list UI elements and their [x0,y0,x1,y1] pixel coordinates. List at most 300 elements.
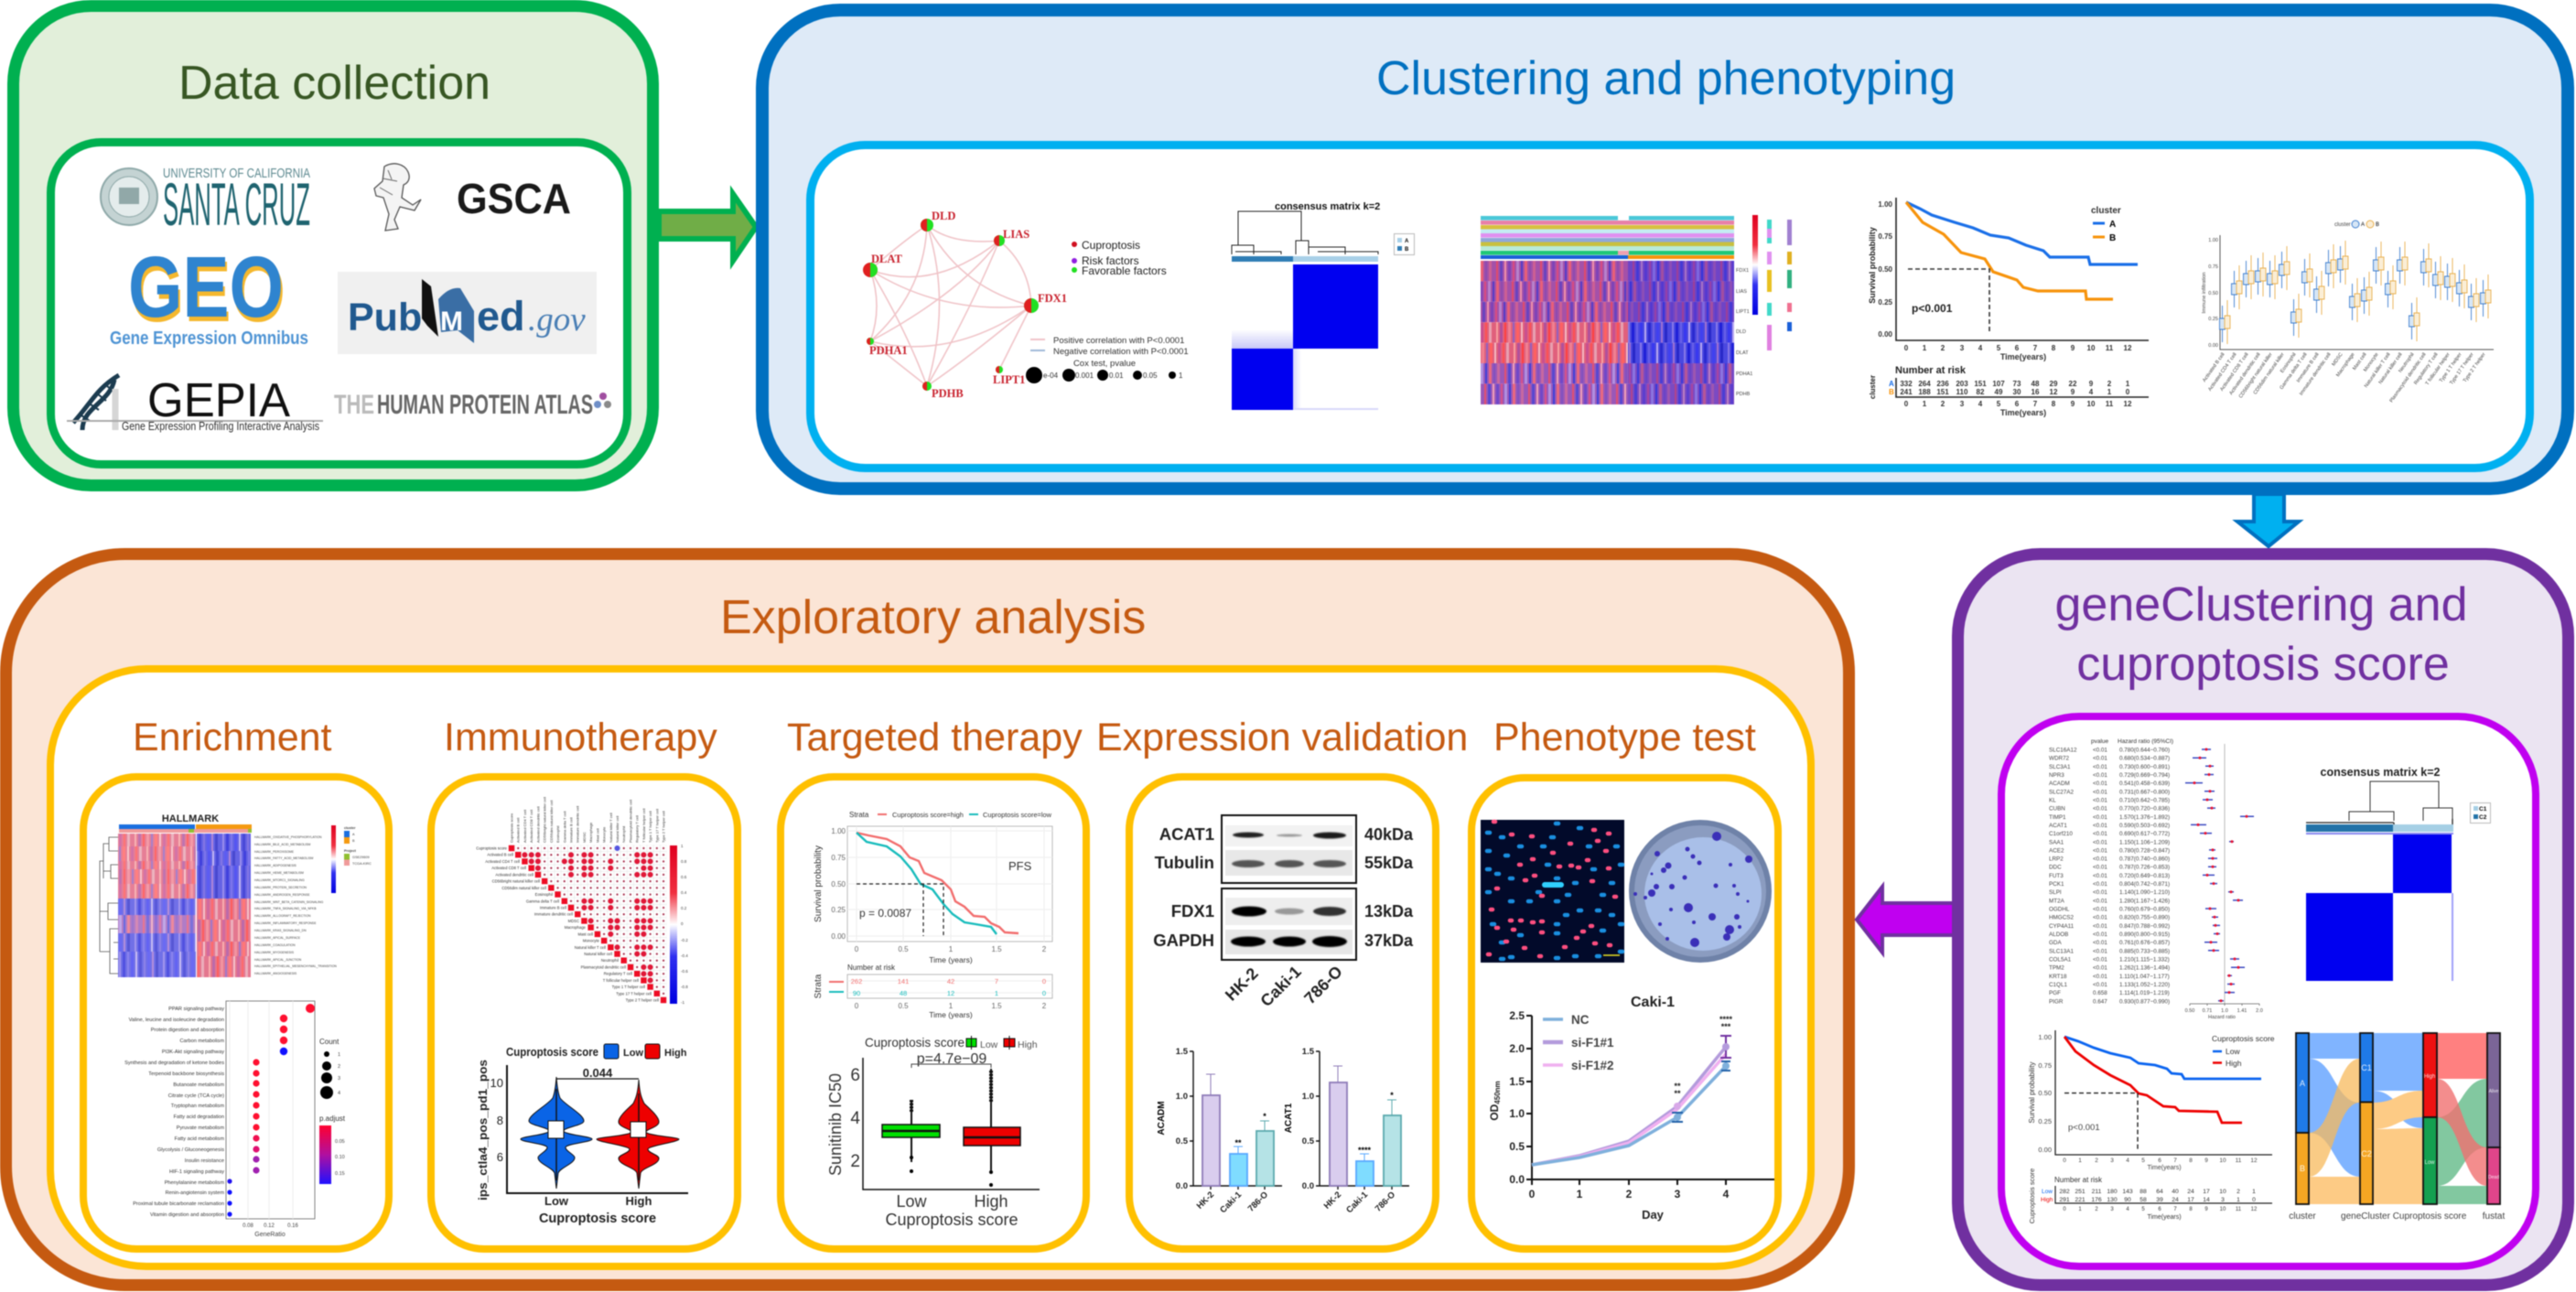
chart: sankey diagram: cluster [2289,1211,2316,1222]
chart: hallmark heatmap: HALLMARK_ALLOGRAFT_REJECTION [254,914,311,918]
chart: forest plot: 1.210(1.115−1.332) [2119,957,2170,963]
chart: forest plot: DDC [2049,865,2062,871]
chart: immune infiltration boxplot: Activated dendritic cell [2228,352,2262,396]
chart: gene correlation network: DLD [932,210,955,222]
chart: Caki-1 growth curve: 3 [1675,1188,1681,1200]
chart: survival curve by cuproptosis score: 5 [2141,1157,2145,1164]
chart: KEGG dot plot: Renin-angiotensin system [166,1190,224,1196]
figure: western blots: 40kDa [1364,825,1414,844]
heading: geneClustering and cuproptosis score: geneClustering and [2055,578,2467,631]
figure: western blots: Tubulin [1155,853,1214,872]
chart: immune infiltration boxplot: Plasmacytoid dendritic cell [2389,352,2428,404]
logo: GSCA: GSCA [457,175,571,222]
chart: survival curve by cluster: B [2109,233,2116,243]
chart: correlation matrix: Regulatory T cell [635,815,640,843]
chart: forest plot: GDA [2049,940,2062,946]
chart: forest plot: <0.01 [2093,856,2107,863]
chart: correlation matrix: Natural killer cell [615,816,620,843]
chart: forest plot: 0.770(0.720−0.836) [2119,806,2170,813]
chart: KEGG dot plot: Insulin resistance [185,1158,224,1164]
chart: hallmark heatmap: HALLMARK_BILE_ACID_METABOLISM [254,843,311,846]
chart: forest plot: <0.01 [2093,965,2107,972]
chart: PFS survival curve: 48 [900,989,907,997]
chart: sankey diagram [2289,1033,2505,1222]
chart: KEGG dot plot: 0.12 [264,1223,275,1229]
chart: correlation matrix [476,797,688,1005]
panel: phenotype test [1471,778,1778,1249]
chart: immune infiltration boxplot: Mast cell [2352,352,2368,371]
figure: fluorescence microscopy [1481,820,1624,963]
chart: PFS survival curve: 1 [949,945,954,953]
chart: survival curve by cuproptosis score: 2 [2236,1189,2240,1195]
chart: gene correlation network: e-04 [1043,371,1059,380]
chart: forest plot: 1.570(1.376−1.892) [2119,814,2170,821]
chart: survival curve by cuproptosis score: High [2041,1197,2053,1203]
chart: survival curve by cuproptosis score: 4 [2126,1207,2129,1212]
chart: PFS survival curve: Time (years) [929,1010,973,1019]
chart: forest plot: MT2A [2049,898,2065,904]
chart: hallmark heatmap: cluster [344,826,356,830]
chart: forest plot [2049,738,2263,1020]
chart: forest plot: <0.01 [2093,756,2107,762]
chart: forest plot: <0.01 [2093,865,2107,871]
chart: correlation matrix: T follicular helper cell [603,978,639,983]
chart: ACAT1 bars: 1.0 [1302,1092,1314,1102]
chart: forest plot: <0.01 [2093,889,2107,896]
chart: KEGG dot plot: 0.15 [335,1171,345,1177]
chart: KEGG dot plot: 0.08 [243,1223,253,1229]
chart: survival curve by cluster: 7 [2033,400,2038,408]
chart: KEGG dot plot [124,1001,346,1238]
chart: correlation matrix: Neutrophil [621,826,626,843]
chart: ACAT1 bars: ACAT1 [1284,1103,1294,1133]
chart: sunitinib boxplot: Low [896,1192,928,1211]
chart: forest plot: 0.590(0.503−0.692) [2119,823,2170,829]
chart: ACADM bars: ** [1234,1138,1242,1147]
panel: exploratory analysis [5,554,1848,1285]
chart: survival curve by cuproptosis score: 24 [2187,1189,2194,1195]
chart: correlation matrix: -1 [681,1000,684,1005]
logo: UC Santa Cruz [101,167,310,238]
chart: annotated heatmap: PDHA1 [1736,371,1752,377]
chart: ACAT1 bars: 0.0 [1302,1181,1314,1191]
chart: survival curve by cuproptosis score: 10 [2219,1157,2226,1164]
chart: KEGG dot plot: PI3K-Akt signaling pathway [162,1050,224,1055]
chart: correlation matrix: Gamma delta T cell [562,811,566,843]
chart: correlation matrix: CD56dim natural killer cell [501,886,546,890]
chart: forest plot: 0.647 [2093,998,2107,1005]
chart: violin plot: Low [544,1194,569,1208]
chart: survival curve by cuproptosis score: 8 [2189,1157,2193,1164]
chart: KEGG dot plot: Fatty acid degradation [174,1114,224,1120]
chart: ACAT1 bars: * [1390,1091,1394,1100]
chart: correlation matrix: Activated CD4 T cell [485,859,520,864]
chart: forest plot: ACE2 [2049,847,2064,854]
chart: hallmark heatmap: HALLMARK_WNT_BETA_CATENIN_SIGNALING [254,900,324,904]
chart: KEGG dot plot: Citrate cycle (TCA cycle) [168,1093,224,1099]
chart: immune infiltration boxplot: Immature dendritic cell [2299,352,2333,396]
chart: correlation matrix: Monocyte [583,939,600,943]
heading: immunotherapy: Immunotherapy [444,716,717,759]
chart: forest plot: PIGR [2049,998,2064,1005]
chart: survival curve by cuproptosis score: 24 [2172,1197,2179,1203]
chart: survival curve by cluster: 3 [1960,400,1965,408]
chart: correlation matrix: MDSC [582,832,587,843]
chart: hallmark heatmap: HALLMARK_ADIPOGENESIS [254,864,297,867]
logo: GEO: GEO [128,239,284,336]
chart: ACADM bars: 0.0 [1176,1181,1188,1191]
chart: violin plot: 8 [497,1114,503,1127]
chart: violin plot: Cuproptosis score [539,1211,656,1226]
chart: sankey diagram: Alive [2489,1089,2499,1094]
chart: forest plot: COL5A1 [2049,957,2072,963]
chart: hallmark heatmap: HALLMARK_INFLAMMATORY_RESPONSE [254,921,317,925]
chart: forest plot: SLC16A12 [2049,747,2077,754]
chart: forest plot: TPM2 [2049,965,2064,972]
chart: survival curve by cluster: 1.00 [1878,200,1893,209]
chart: violin plot: ips_ctla4_pos_pd1_pos [476,1060,490,1200]
chart: PFS survival curve: 0.50 [831,880,846,888]
chart: forest plot: 0.731(0.667−0.800) [2119,789,2170,795]
chart: correlation matrix: 0.8 [681,859,687,864]
chart: survival curve by cluster: 9 [2089,380,2094,388]
chart: survival curve by cluster: 6 [2015,344,2020,352]
chart: survival curve by cuproptosis score: 10 [2219,1189,2226,1195]
chart: forest plot: <0.01 [2093,798,2107,803]
chart: immune infiltration boxplot: A [2361,222,2365,228]
logo: PubMed [338,272,597,354]
chart: consensus matrix k=2: C2 [2479,814,2487,821]
chart: forest plot: 1.280(1.167−1.426) [2119,898,2170,904]
chart: forest plot: <0.01 [2093,982,2107,988]
chart: survival curve by cluster: 10 [2087,344,2096,352]
chart: forest plot: 0.730(0.600−0.891) [2119,764,2170,770]
chart: correlation matrix: Plasmacytoid dendritic cell [581,964,626,970]
chart: survival curve by cluster: 10 [2087,400,2096,408]
chart: forest plot: 0.787(0.740−0.860) [2119,856,2170,863]
chart: Caki-1 growth curve: **** [1719,1015,1732,1024]
chart: survival curve by cluster: cluster [1869,375,1877,399]
chart: ACADM bars: * [1263,1112,1266,1121]
chart: PFS survival curve: 42 [947,977,954,985]
chart: correlation matrix: Eosinophil [555,825,560,843]
logo: GSCA [374,164,571,231]
chart: correlation matrix: Cuproptosis score [476,845,508,851]
chart: forest plot: 0.787(0.726−0.853) [2119,865,2170,871]
chart: gene correlation network: Risk factors [1082,254,1139,267]
chart: survival curve by cluster: 11 [2106,400,2114,408]
chart: survival curve by cuproptosis score: 291 [2059,1197,2070,1203]
chart: Caki-1 growth curve [1488,995,1774,1222]
chart: violin plot: Low [623,1048,643,1059]
chart: forest plot: ACADM [2049,781,2070,787]
chart: Caki-1 growth curve: 2.0 [1509,1042,1525,1055]
chart: KEGG dot plot: Butanoate metabolism [173,1082,224,1088]
chart: immune infiltration boxplot: Natural killer T cell [2364,352,2392,389]
chart: survival curve by cluster: 110 [1956,388,1968,396]
figure: western blots: ACAT1 [1159,824,1214,844]
chart: immune infiltration boxplot: Activated B cell [2202,352,2226,383]
chart: ACAT1 bars: 1.5 [1302,1047,1315,1057]
chart: hallmark heatmap: TCGA-KIRC [352,862,372,866]
chart: forest plot: <0.01 [2093,873,2107,879]
chart: ACADM bars: ACADM [1157,1101,1167,1136]
chart: hallmark heatmap: HALLMARK_MYOGENESIS [254,951,295,954]
chart: forest plot: CUBN [2049,806,2065,813]
chart: survival curve by cluster: A [1889,380,1894,388]
chart: immune infiltration boxplot: MDSC [2331,352,2344,367]
chart: Caki-1 growth curve: 0 [1529,1188,1536,1200]
chart: sunitinib boxplot: p=4.7e−09 [917,1051,986,1067]
chart: survival curve by cuproptosis score: 1 [2078,1207,2082,1212]
chart: survival curve by cuproptosis score: 143 [2122,1189,2133,1195]
chart: forest plot: 1.114(1.019−1.219) [2119,990,2170,996]
chart: consensus matrix k=2 [2306,766,2491,981]
chart: sankey diagram: Low [2424,1160,2435,1166]
chart: survival curve by cluster: 8 [2052,400,2056,408]
chart: forest plot: 0.541(0.458−0.639) [2119,781,2170,787]
chart: forest plot: 2.0 [2256,1008,2263,1014]
chart: survival curve by cluster: cluster [2091,206,2121,216]
chart: correlation matrix: -0.6 [681,969,688,974]
chart: KEGG dot plot: Fatty acid metabolism [175,1136,224,1142]
chart: gene correlation network: 0.05 [1143,371,1158,380]
chart: survival curve by cuproptosis score: 90 [2124,1197,2131,1203]
chart: survival curve by cuproptosis score: 8 [2189,1207,2193,1212]
chart: sunitinib boxplot: 6 [850,1066,860,1085]
chart: immune infiltration boxplot: Immune infiltration [2202,273,2207,313]
chart: Caki-1 growth curve: si-F1#1 [1571,1036,1614,1050]
chart: PFS survival curve: Strata [814,974,824,998]
chart: survival curve by cluster: 2 [2107,380,2112,388]
inner panel: gene clustering charts [2001,716,2536,1266]
chart: survival curve by cuproptosis score [2028,1030,2275,1223]
panel: immunotherapy [431,777,738,1249]
chart: forest plot: PGF [2049,990,2061,996]
chart: forest plot: 0.780(0.728−0.847) [2119,847,2170,854]
chart: forest plot: 0.729(0.669−0.794) [2119,772,2170,779]
chart: survival curve by cluster: 12 [2124,400,2132,408]
chart: survival curve by cuproptosis score: 6 [2158,1157,2161,1164]
chart: immune infiltration boxplot: Regulatory T cell [2413,352,2440,386]
chart: correlation matrix: Type 2 T helper cell [661,811,666,843]
chart: survival curve by cuproptosis score: 0.00 [2038,1146,2052,1154]
chart: survival curve by cuproptosis score: 130 [2107,1197,2118,1203]
chart: survival curve by cuproptosis score: 6 [2158,1207,2161,1212]
chart: sankey diagram: fustat [2483,1211,2505,1222]
chart: survival curve by cluster: 0.25 [1878,298,1893,307]
chart: KEGG dot plot: 2 [338,1064,340,1070]
chart: survival curve by cuproptosis score: 282 [2059,1189,2070,1195]
chart: survival curve by cluster: 12 [2050,388,2058,396]
chart: survival curve by cluster: 1 [2126,380,2130,388]
chart: sunitinib boxplot: High [1018,1039,1038,1050]
chart: KEGG dot plot: GeneRatio [254,1232,286,1238]
panel: expression validation [1129,777,1436,1249]
chart: survival curve by cuproptosis score: 221 [2075,1197,2086,1203]
chart: forest plot: 0.761(0.676−0.857) [2119,940,2170,946]
chart: gene correlation network: LIAS [1003,228,1029,241]
chart: KEGG dot plot: Carbon metabolism [179,1039,224,1044]
figure: western blots [1153,815,1414,1010]
chart: KEGG dot plot: Count [319,1038,340,1046]
chart: survival curve by cuproptosis score: 9 [2204,1157,2208,1164]
chart: survival curve by cluster: 4 [1978,400,1983,408]
chart: forest plot: 0.804(0.742−0.871) [2119,881,2170,888]
logo: GEPIA: Gene Expression Profiling Interactive Analysis [122,419,319,433]
chart: survival curve by cuproptosis score: 4 [2126,1157,2129,1164]
chart: forest plot: LRP2 [2049,856,2064,863]
chart: ACADM bars: 786-O [1246,1190,1270,1214]
chart: correlation matrix: Macrophage [588,822,593,843]
chart: forest plot: 0.930(0.877−0.990) [2119,998,2170,1005]
chart: correlation matrix: T follicular helper cell [641,808,646,843]
chart: violin plot: 10 [490,1076,503,1090]
chart: survival curve by cuproptosis score: 251 [2075,1189,2086,1195]
chart: survival curve by cluster: 2 [1941,400,1945,408]
chart: survival curve by cuproptosis score: 1 [2252,1189,2256,1195]
chart: forest plot: SLC3A1 [2049,764,2071,770]
chart: survival curve by cuproptosis score: 14 [2203,1197,2210,1203]
heading: enrichment: Enrichment [133,716,332,759]
chart: violin plot: High [664,1048,687,1059]
panel: clustering and phenotyping [762,10,2568,489]
chart: forest plot: pvalue [2091,738,2109,745]
chart: ACADM bars [1157,1047,1282,1215]
chart: KEGG dot plot: 3 [338,1076,340,1082]
chart: forest plot: CYP4A11 [2049,923,2075,930]
chart: Caki-1 growth curve: 1.0 [1509,1107,1525,1120]
chart: forest plot: <0.01 [2093,814,2107,821]
chart: violin plot: Cuproptosis score [506,1046,598,1059]
chart: gene correlation network: 0.001 [1075,371,1094,380]
chart: survival curve by cuproptosis score: 11 [2236,1207,2242,1212]
chart: survival curve by cluster: 5 [1997,400,2001,408]
chart: survival curve by cuproptosis score: 9 [2204,1207,2208,1212]
chart: survival curve by cluster: 6 [2015,400,2020,408]
chart: correlation matrix: Activated dendritic cell [495,872,534,877]
chart: forest plot: HMGCS2 [2049,915,2074,921]
heading: data collection: Data collection [178,57,490,110]
chart: survival curve by cuproptosis score: 7 [2173,1207,2177,1212]
chart: forest plot: ACAT1 [2049,823,2067,829]
chart: PFS survival curve: 0 [855,1002,859,1010]
logo: UC Santa Cruz: UNIVERSITY OF CALIFORNIA [163,167,310,181]
chart: survival curve by cuproptosis score: 0.50 [2038,1089,2052,1097]
chart: forest plot: <0.01 [2093,847,2107,854]
arrow: data collection to clustering [659,194,756,261]
chart: survival curve by cluster: 9 [2071,400,2075,408]
chart: ACAT1 bars: **** [1358,1146,1371,1155]
chart: Caki-1 growth curve: OD [1488,1104,1501,1121]
chart: correlation matrix: Mast cell [595,828,599,843]
chart: survival curve by cluster: 5 [1997,344,2001,352]
chart: ACADM bars: HK-2 [1195,1190,1216,1211]
chart: forest plot: 0.820(0.755−0.890) [2119,915,2170,921]
chart: Caki-1 growth curve: NC [1571,1013,1590,1027]
logo: PubMed: .gov [528,301,586,339]
chart: annotated heatmap: PDHB [1736,392,1751,397]
chart: correlation matrix: Type 2 T helper cell [626,997,659,1003]
chart: gene correlation network: PDHA1 [869,344,908,357]
chart: forest plot: 1.0 [2221,1008,2228,1014]
chart: survival curve by cuproptosis score: 17 [2187,1197,2194,1203]
chart: forest plot: <0.01 [2093,789,2107,795]
chart: survival curve by cluster: 3 [1960,344,1965,352]
chart: forest plot: <0.01 [2093,839,2107,845]
chart: survival curve by cuproptosis score: 88 [2139,1189,2147,1195]
chart: forest plot: 0.71 [2203,1008,2212,1014]
chart: forest plot: <0.01 [2093,806,2107,813]
chart: hallmark heatmap: HALLMARK_APICAL_JUNCTION [254,958,302,962]
figure: western blots: Caki-1 [1256,963,1305,1010]
chart: survival curve by cluster: B [1889,388,1894,396]
chart: gene correlation network: Cuproptosis [1082,239,1140,252]
chart: immune infiltration boxplot: 0.00 [2208,343,2218,349]
chart: forest plot: PCK1 [2049,881,2064,888]
chart: forest plot: SAA1 [2049,839,2064,845]
chart: survival curve by cluster: 9 [2071,344,2075,352]
chart: KEGG dot plot: p.adjust [319,1114,346,1123]
chart: survival curve by cluster: 151 [1936,388,1949,396]
chart: correlation matrix: Activated CD8 T cell [491,866,526,870]
chart: correlation matrix: Immature dendritic cell [534,912,573,917]
chart: forest plot: <0.01 [2093,772,2107,779]
chart: sankey diagram: B [2300,1164,2305,1173]
chart: forest plot: <0.01 [2093,781,2107,787]
chart: forest plot: Hazard ratio [2208,1015,2236,1020]
chart: sunitinib boxplot: Sunitinib IC50 [826,1073,845,1176]
chart: correlation matrix: Mast cell [577,931,593,936]
logo: Human Protein Atlas: HUMAN PROTEIN ATLAS [377,390,593,420]
chart: forest plot: <0.01 [2093,940,2107,946]
chart: immune infiltration boxplot: Type 1 T helper [2439,352,2463,383]
chart: hallmark heatmap: A [352,833,355,836]
chart: correlation matrix: Activated dendritic cell [535,806,540,843]
chart: forest plot: SLPI [2049,889,2062,896]
chart: KEGG dot plot: 0.05 [335,1139,345,1145]
chart: survival curve by cluster: 0 [1904,344,1909,352]
chart: correlation matrix: 1 [681,844,684,848]
chart: immune infiltration boxplot: Neutrophil [2398,352,2416,374]
chart: correlation matrix: Cuproptosis score [509,813,514,843]
chart: correlation matrix: Type 17 T helper cell [654,809,659,843]
chart: survival curve by cuproptosis score: 10 [2220,1207,2226,1212]
chart: correlation matrix: -0.4 [681,953,688,958]
chart: KEGG dot plot: Phenylalanine metabolism [165,1180,224,1186]
chart: survival curve by cuproptosis score: Time(years) [2147,1214,2182,1221]
chart: violin plot: 0.044 [583,1066,613,1080]
chart: gene correlation network: Favorable factors [1082,264,1167,277]
chart: forest plot: KL [2049,798,2056,803]
chart: survival curve by cuproptosis score: 2 [2095,1157,2098,1164]
figure: western blots: 13kDa [1364,902,1414,921]
logo: GEPIA [67,374,323,433]
chart: forest plot: <0.01 [2093,881,2107,888]
chart: Caki-1 growth curve: 0.5 [1509,1140,1525,1153]
chart: correlation matrix: Monocyte [602,826,607,843]
chart: annotated heatmap: FDX1 [1736,268,1749,274]
chart: annotated heatmap: LIPT1 [1736,309,1750,315]
logo: PubMed: ed [477,293,525,339]
chart: correlation matrix: 0.4 [681,890,687,895]
chart: immune infiltration boxplot: Immature B cell [2296,352,2321,383]
chart: sankey diagram: Cuproptosis score [2393,1211,2467,1222]
chart: forest plot: Hazard ratio (95%CI) [2118,738,2173,745]
figure: western blots: 55kDa [1364,854,1414,872]
chart: survival curve by cuproptosis score: 1 [2078,1157,2082,1164]
chart: immune infiltration boxplot: CD56dim natural killer [2253,352,2286,395]
